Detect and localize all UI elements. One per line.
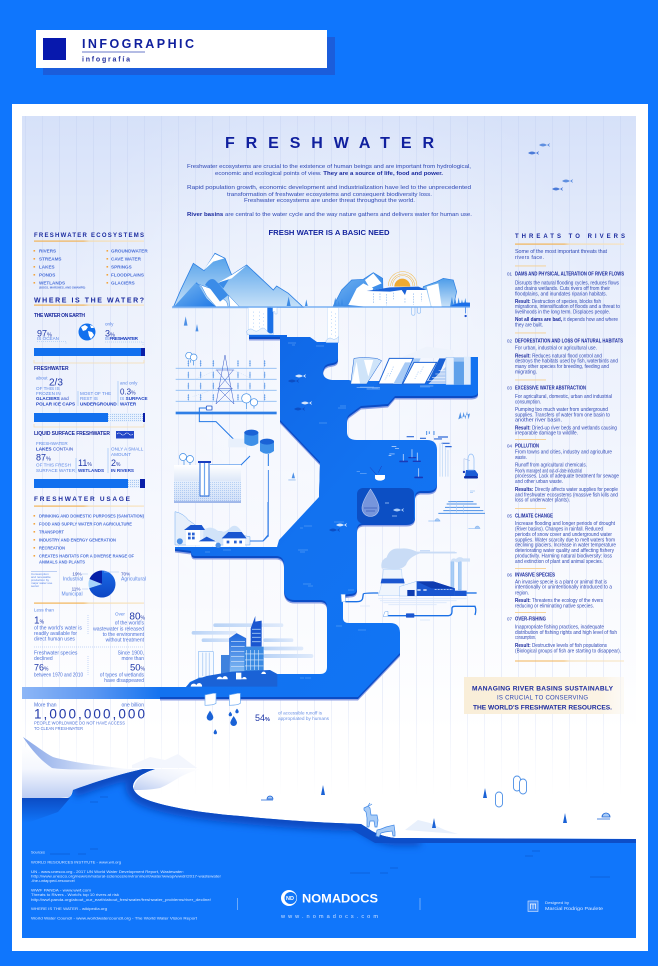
threat 05 climate change: (River basins). Changes in rainfall. Reduced: [515, 527, 603, 533]
stat: 0.3% surface: and only: [120, 380, 138, 386]
sources: http://wwf.panda.org/about_our_earth/about_freshwater/freshwater_problems/river_decline/: [31, 898, 212, 902]
stat: 2/3 frozen: OF THIS IS: [36, 386, 60, 391]
stat: 1%: readily available for: [34, 631, 77, 637]
pie note: major water use: [31, 581, 53, 585]
stat: 80% wastewater: to the environment: [103, 632, 145, 638]
threat 06 invasive species: reducing or eliminating native species.: [515, 603, 594, 609]
header banner: [36, 30, 335, 75]
usage list: CREATES HABITATS FOR A DIVERSE RANGE OF: [39, 554, 134, 559]
threat 05 climate change: Increase flooding and longer periods of drought: [515, 521, 616, 527]
threat 04 pollution: processes. Lack of adequate treatment for sewage: [515, 474, 619, 480]
intro text: Rapid population growth, economic development and industrialization have led to the unprecedented: [187, 185, 471, 191]
threat 05 climate change: productivity. Harming natural biodiversity: loss: [515, 554, 612, 560]
threat 01 dams: Disrupts the natural flooding cycles, reduces flows: [515, 281, 619, 287]
stat: underground: [78, 391, 117, 406]
threat 04 pollution: Results: Directly affects water supplies for people: [515, 487, 618, 493]
pie note: and renewable: [31, 575, 51, 579]
supply pipe to village: [250, 502, 268, 541]
panel: threats to rivers: THREATS TO RIVERS: [515, 234, 625, 240]
pie chart: [82, 570, 119, 598]
pie labels: [61, 572, 146, 598]
panel: where is the water: THE WATER ON EARTH: [34, 313, 85, 319]
stat: lakes 87%: 87%: [36, 452, 51, 462]
stat: one billion: PEOPLE WORLDWIDE DO NOT HAVE ACCESS: [34, 721, 125, 726]
stat: 3% freshwater: IS FRESHWATER: [105, 336, 139, 341]
stat: 76% species: declined: [34, 656, 53, 662]
stat: accessible runoff: [255, 710, 330, 723]
icon: water waves: [116, 431, 134, 438]
threat 03 abstraction: Pumping too much water from underground: [515, 407, 608, 413]
stat: 80% wastewater: 80%: [129, 612, 146, 622]
intro text: Freshwater ecosystems are crucial to the existence of human beings and are important from hydrological,: [187, 164, 471, 170]
excavator: [464, 454, 478, 492]
threat 03 abstraction: another river basin.: [515, 418, 562, 424]
outlets and drips: [205, 693, 240, 734]
stat: wetlands 11%: 11%: [78, 458, 92, 468]
threat 06 invasive species: INVASIVE SPECIES: [515, 573, 556, 579]
threat 06 invasive species: [507, 568, 612, 609]
sources: http://www.unesco.org/new/en/natural-sciences/environment/water/wwap/wwdr/2017-wastewater: [31, 874, 222, 878]
threat 01 dams: Result: Destruction of species, blocks fish: [515, 299, 601, 305]
stat: 76% species: between 1970 and 2010: [34, 672, 83, 678]
stat: rivers 2%: AMOUNT: [111, 452, 131, 457]
threat 07 over-fishing: (Biological groups of fish are starting to disappear).: [515, 648, 621, 654]
groundwater well: [174, 454, 241, 503]
panel: freshwater ecosystems: [34, 233, 148, 290]
stat: 50% wetlands: 50%: [130, 662, 146, 674]
intro text: Freshwater ecosystems are under threat throughout the world.: [244, 198, 415, 204]
stat: 50% wetlands: have disappeared: [104, 678, 144, 684]
threat 03 abstraction: Result: Dried-up river beds and wetlands causing: [515, 425, 617, 431]
stat: 80% wastewater: wastewater is released: [93, 626, 144, 632]
pie labels: Municipal: [61, 592, 83, 598]
threat 07 over-fishing: distribution of fishing rights and high level of fish: [515, 630, 617, 636]
stat: 3% freshwater: only: [105, 322, 114, 326]
icon: globe: [78, 324, 96, 340]
threat 01 dams: [507, 266, 625, 328]
logo: nomadocs: NOMADOCS: [302, 892, 378, 906]
stat: one billion: one billion: [121, 703, 144, 709]
callout: managing river basins: [464, 677, 624, 714]
stat: 50% wetlands: Since 1900,: [118, 650, 144, 656]
stat: 76% species: Freshwater species: [34, 650, 78, 656]
sources: UN - www.unesco.org - 2017 UN World Water Development Report, Wastewater:: [31, 870, 184, 874]
threat 05 climate change: declining glaciers. Increase in water temperature: [515, 543, 616, 549]
stat: 80% wastewater: without treatment: [106, 638, 145, 644]
stat: 50% wetlands: more than: [121, 656, 144, 662]
fishing boats: [288, 411, 470, 481]
stat: rivers 2%: ONLY A SMALL: [111, 446, 144, 452]
banner subtitle: infografía: [82, 56, 130, 64]
usage list: ANIMALS AND PLANTS: [39, 560, 85, 565]
stat: 97% ocean: IS OCEAN: [37, 336, 59, 341]
stat: wetlands 11%: WETLANDS: [78, 468, 104, 473]
usage list: INDUSTRY AND ENERGY GENERATION: [39, 538, 117, 543]
riverbank details: [407, 437, 452, 447]
panel: freshwater ecosystems: FRESHWATER ECOSYSTEMS: [34, 233, 144, 239]
panel: where is the water: WHERE IS THE WATER?: [34, 298, 144, 304]
threat 01 dams: 01: [507, 272, 513, 277]
sources: WWF PANDA - www.wwf.com: [31, 888, 91, 892]
sun: [388, 272, 417, 287]
threat 06 invasive species: intentionally or unintentionally introduced to a: [515, 585, 612, 591]
icon: banner square: [43, 38, 66, 60]
threat 06 invasive species: An invasive specie is a plant or animal that is: [515, 579, 607, 585]
stat: 2/3 frozen: 2/3: [49, 378, 63, 388]
stat: 80% wastewater: of the world's: [115, 620, 144, 626]
stat: 1%: [34, 608, 82, 642]
riverside logging: [420, 502, 485, 553]
threat 07 over-fishing: 07: [507, 616, 513, 621]
waterfalls: [184, 307, 467, 343]
callout: managing river basins: THE WORLD'S FRESHWATER RESOURCES.: [473, 704, 612, 712]
stat: rivers 2%: 2%: [111, 458, 121, 468]
threat 04 pollution: and other urban waste.: [515, 479, 563, 485]
stat: one billion: 1,000,000,000: [34, 706, 145, 722]
panel: where is the water: FRESHWATER: [34, 366, 69, 372]
sources: Sources: [31, 850, 45, 854]
designer credit: [528, 901, 603, 912]
stat: 1%: Less than: [34, 608, 54, 612]
water tanks: [228, 439, 248, 447]
bar: water on earth: [34, 348, 145, 356]
stat: 50% wetlands: [100, 650, 146, 684]
stat: underground: UNDERGROUND: [80, 402, 117, 406]
threat 01 dams: Not all dams are bad, it depends how and where: [515, 317, 618, 323]
stat: 3% freshwater: 3%: [105, 328, 115, 338]
stat: lakes 87%: [36, 441, 76, 473]
icon: standing deer: [364, 803, 378, 827]
icon: pylon: [216, 355, 234, 404]
stat: 1%: of the world's water is: [34, 626, 82, 632]
threat 07 over-fishing: Inappropriate fishing practices, inadequate: [515, 625, 604, 631]
ecosystem list: LAKES: [39, 265, 55, 270]
intro text: transformation of freshwater ecosystems and consequent biodiversity loss.: [227, 192, 432, 198]
stat: rivers 2%: IN RIVERS: [111, 468, 134, 473]
title: FRESHWATER: [225, 135, 434, 152]
stat: 0.3% surface: IS SURFACE: [120, 396, 148, 401]
ecosystem list: (BOGS, MARSHES, AND SWAMPS): [39, 286, 85, 290]
ecosystem list: [34, 249, 148, 290]
threat 02 deforestation: For urban, industrial or agricultural use.: [515, 346, 597, 352]
pie note: Consumption: [31, 572, 49, 576]
threat 03 abstraction: 03: [507, 386, 513, 391]
panel: freshwater usage: [31, 496, 146, 684]
threat 02 deforestation: [507, 332, 624, 375]
pie note: [31, 571, 57, 588]
intro text: [187, 164, 472, 218]
stat: 97% ocean: [37, 328, 66, 344]
water ripples: [50, 797, 610, 877]
dam: [351, 347, 471, 389]
usage list: FOOD AND SUPPLY WATER FOR AGRICULTURE: [39, 522, 132, 527]
stat: 1%: direct human uses: [34, 636, 75, 642]
logo: nomadocs: www.nomadocs.com: [280, 914, 378, 920]
river: [160, 335, 478, 700]
icon: grazing deer: [376, 825, 395, 837]
logo: nomadocs: [280, 890, 378, 920]
stat: lakes 87%: FRESHWATER: [36, 441, 68, 446]
usage list: [34, 514, 144, 565]
callout: managing river basins: MANAGING RIVER BASINS SUSTAINABLY: [472, 686, 614, 692]
ecosystem list: GLACIERS: [111, 281, 135, 286]
threat 01 dams: they are built.: [515, 322, 543, 328]
mountains: [173, 253, 308, 307]
pie note: sector: [31, 584, 39, 588]
ecosystem list: WETLANDS: [39, 281, 65, 286]
stat: lakes 87%: LAKES CONTAIN: [36, 446, 73, 452]
threat 05 climate change: periods of snow cover and underground water: [515, 532, 612, 538]
panel: freshwater usage: FRESHWATER USAGE: [34, 496, 131, 503]
sources: Threats to Rivers - World's top 10 rivers at risk: [31, 893, 119, 897]
threat 07 over-fishing: [507, 612, 621, 654]
threat 01 dams: migrations, intensification of floods and a threat to: [515, 304, 620, 310]
threat 02 deforestation: many other species for breeding, feeding and: [515, 364, 609, 370]
stat: underground: REST IS: [80, 396, 98, 401]
ecosystem list: SPRINGS: [111, 265, 132, 270]
ground line: [172, 306, 470, 308]
threat 02 deforestation: DEFORESTATION AND LOSS OF NATURAL HABITATS: [515, 339, 624, 345]
stat: wetlands 11%: [76, 458, 104, 473]
threat 01 dams: livelihoods in the long term. Displaces people.: [515, 309, 610, 315]
threat 06 invasive species: 06: [507, 573, 513, 578]
birds: [528, 143, 573, 191]
ecosystem list: GROUNDWATER: [111, 249, 148, 254]
village: [175, 470, 268, 548]
threat 04 pollution: loss of underwater plants).: [515, 498, 570, 504]
threat 03 abstraction: EXCESSIVE WATER ABSTRACTION: [515, 386, 586, 392]
stat: 80% wastewater: Over: [115, 612, 125, 616]
farmland with pylon: [176, 352, 277, 466]
stat: 2/3 frozen: GLACIERS and: [36, 396, 69, 401]
pie labels: Agricultural: [121, 577, 146, 583]
threat 04 pollution: waste.: [515, 455, 527, 461]
ecosystem list: FLOODPLAINS: [111, 273, 144, 278]
sources: -the-untapped-resource/: [31, 879, 76, 883]
factory pipes: [345, 593, 378, 602]
usage list: RECREATION: [39, 546, 66, 551]
pie note: production by: [31, 578, 50, 582]
threat 02 deforestation: destroys the habitats used by fish, waterbirds and: [515, 359, 618, 365]
panel: where is the water: [34, 298, 148, 488]
power plant and factory: [341, 548, 477, 620]
pie labels: 70%: [121, 572, 130, 577]
stat: 97% ocean: 97%: [37, 328, 52, 338]
ecosystem list: CAVE WATER: [111, 257, 142, 262]
sources: WORLD RESOURCES INSTITUTE - www.wri.org: [31, 860, 121, 864]
threat 06 invasive species: Result: Threatens the ecology of the rivers: [515, 598, 603, 604]
threat 01 dams: floodplains, and inundates riparian habitats.: [515, 291, 607, 297]
threat 04 pollution: 04: [507, 444, 513, 449]
stat: accessible runoff: appropriated by humans: [278, 716, 330, 721]
stat: 50% wetlands: of types of wetlands: [100, 672, 144, 678]
threat 03 abstraction: consumption.: [515, 399, 541, 405]
threat 07 over-fishing: consumption.: [515, 635, 536, 641]
threat 04 pollution: Runoff from agricultural chemicals.: [515, 463, 587, 469]
ice cliffs and reservoir: [333, 273, 470, 307]
pie labels: Industrial: [63, 577, 83, 583]
sources: [31, 850, 222, 920]
logo: nomadocs: ND: [286, 896, 294, 902]
threat 07 over-fishing: Result: Destructive levels of fish populations: [515, 643, 607, 649]
stat: 0.3% surface: 0.3%: [120, 388, 136, 396]
stat: lakes 87%: SURFACE WATER: [36, 468, 76, 473]
sources: WHERE IS THE WATER - wikipedia.org: [31, 907, 107, 911]
designer credit: Designed by: [545, 901, 569, 905]
city: [186, 616, 313, 687]
stat: 3% freshwater: [105, 322, 143, 345]
threat 01 dams: and drains wetlands. Cuts rivers off from their: [515, 286, 610, 292]
callout: managing river basins: IS CRUCIAL TO CONSERVING: [497, 696, 588, 702]
stat: one billion: TO CLEAN FRESHWATER: [34, 726, 84, 731]
stat: 1%: 1%: [34, 616, 45, 626]
panel: threats to rivers: [507, 234, 625, 662]
stat: 76% species: 76%: [34, 662, 49, 672]
stat: lakes 87%: OF THIS FRESH: [36, 462, 71, 468]
intro text: economic and ecological points of view. They are a source of life, food and power.: [215, 171, 444, 177]
threat 02 deforestation: 02: [507, 339, 513, 344]
stat: 0.3% surface: WATER: [120, 402, 137, 406]
trees: [186, 352, 258, 409]
ecosystem list: PONDS: [39, 273, 55, 278]
ecosystem list: RIVERS: [39, 249, 56, 254]
panel: where is the water: LIQUID SURFACE FRESHWATER: [34, 431, 110, 437]
threat 05 climate change: [507, 508, 616, 565]
threat 02 deforestation: Result: Reduces natural flood control and: [515, 353, 602, 359]
stat: 2/3 frozen: FROZEN IN: [36, 391, 61, 396]
bar: freshwater: [34, 413, 145, 422]
banner title: INFOGRAPHIC: [82, 37, 194, 51]
irrigation pipe: [199, 408, 268, 466]
sources: World Water Council - www.worldwatercouncil.org - The World Water Vision Report: [31, 916, 198, 920]
ripples and fish: [205, 343, 430, 686]
snowy landscape: [22, 737, 458, 834]
intro text: River basins are central to the water cycle and the way nature gathers and delivers water for human use.: [187, 212, 472, 218]
clouds: [192, 623, 313, 658]
wildlife and trees: [261, 776, 610, 837]
stat: accessible runoff: of accessible runoff is: [278, 710, 323, 716]
river band left: [22, 687, 162, 699]
threat 01 dams: DAMS AND PHYSICAL ALTERATION OF RIVER FLOWS: [515, 272, 625, 278]
pie labels: 11%: [72, 587, 80, 592]
stat: 80% wastewater: [93, 612, 146, 644]
polluted pond: [357, 488, 414, 524]
threat 05 climate change: 05: [507, 513, 513, 518]
ecosystem list: STREAMS: [39, 257, 61, 262]
threat 04 pollution: From towns and cities, industry and agriculture: [515, 449, 612, 455]
stat: 0.3% surface: [118, 380, 148, 406]
threat 06 invasive species: region.: [515, 590, 529, 596]
threat 05 climate change: supplies. Water scarcity due to melt waters from: [515, 537, 615, 543]
pie labels: 19%: [72, 572, 82, 577]
threat 05 climate change: CLIMATE CHANGE: [515, 513, 554, 519]
threat 04 pollution: and freshwater ecosystems (massive fish kills and: [515, 492, 618, 498]
threat 03 abstraction: For agricultural, domestic, urban and industrial: [515, 394, 612, 400]
sea: [22, 769, 636, 938]
threat 05 climate change: deteriorating water quality and affecting fishery: [515, 548, 614, 554]
threat 07 over-fishing: OVER-FISHING: [515, 616, 546, 622]
threat 03 abstraction: supplies. Transfers of water from one basin to: [515, 412, 610, 418]
panel: threats to rivers: Some of the most important threats that: [515, 249, 608, 255]
stat: 2/3 frozen: POLAR ICE CAPS: [36, 402, 75, 406]
threat 04 pollution: Poorly managed and out-of-date industrial: [515, 468, 582, 474]
threat 05 climate change: and extinction of plant and animal species.: [515, 559, 603, 565]
stat: one billion: More than: [34, 703, 57, 709]
stat: underground: MOST OF THE: [80, 391, 111, 396]
bar: surface freshwater: [34, 479, 145, 488]
designer credit: Marcial Rodrigo Paulete: [545, 906, 603, 912]
stat: accessible runoff: 54%: [255, 713, 270, 723]
stat: rivers 2%: [108, 446, 144, 473]
threat 04 pollution: [507, 439, 619, 504]
threat 03 abstraction: [507, 380, 617, 437]
threat 02 deforestation: migrating.: [515, 369, 537, 375]
stat: one billion: [34, 703, 145, 731]
usage list: DRINKING AND DOMESTIC PURPOSES (SANITATION): [39, 514, 144, 519]
center heading: FRESH WATER IS A BASIC NEED: [268, 228, 390, 237]
stat: 2/3 frozen: about: [36, 376, 48, 380]
stat: 76% species: [34, 650, 83, 678]
panel: threats to rivers: rivers face.: [515, 255, 544, 261]
stat: 2/3 frozen: [36, 376, 75, 406]
usage list: TRANSPORT: [39, 530, 64, 535]
threat 04 pollution: POLLUTION: [515, 444, 539, 450]
threat 03 abstraction: irreparable damage to wildlife.: [515, 431, 578, 437]
